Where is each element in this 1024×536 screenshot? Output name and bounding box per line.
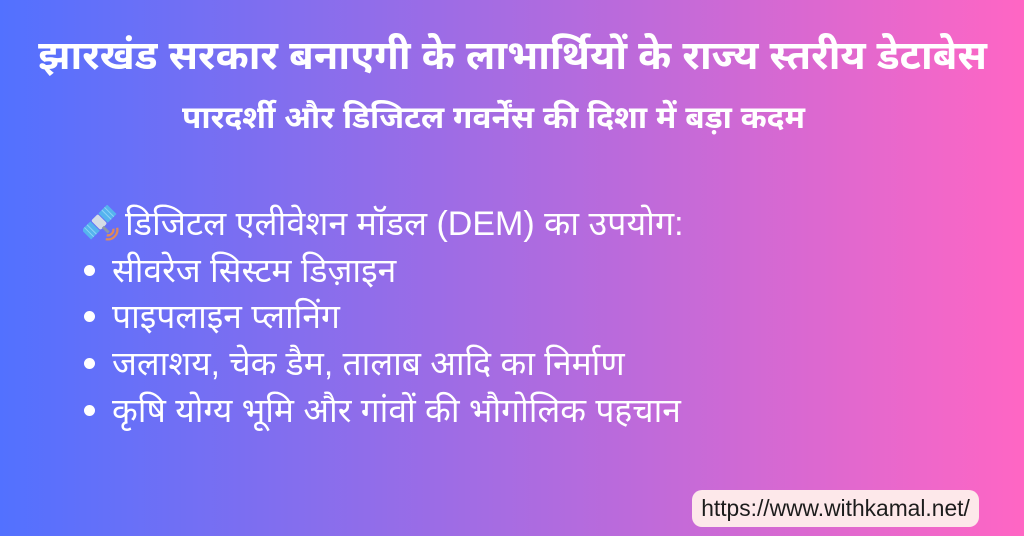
icon: satellite [83,205,118,240]
url badge: https://www.withkamal.net/ [701,495,970,521]
list item 4: कृषि योग्य भूमि और गांवों की भौगोलिक पहचान [112,393,681,430]
url badge [692,490,979,527]
list item 1: सीवरेज सिस्टम डिज़ाइन [112,253,396,290]
subtitle: पारदर्शी और डिजिटल गवर्नेंस की दिशा में बड़ा कदम [182,99,805,135]
text block: DEM heading: डिजिटल एलीवेशन मॉडल (DEM) का उपयोग: [125,205,684,243]
title: झारखंड सरकार बनाएगी के लाभार्थियों के राज्य स्तरीय डेटाबेस [38,34,987,78]
list item 3: जलाशय, चेक डैम, तालाब आदि का निर्माण [112,346,625,383]
bullet list [84,252,682,432]
list item 2: पाइपलाइन प्लानिंग [112,299,340,336]
